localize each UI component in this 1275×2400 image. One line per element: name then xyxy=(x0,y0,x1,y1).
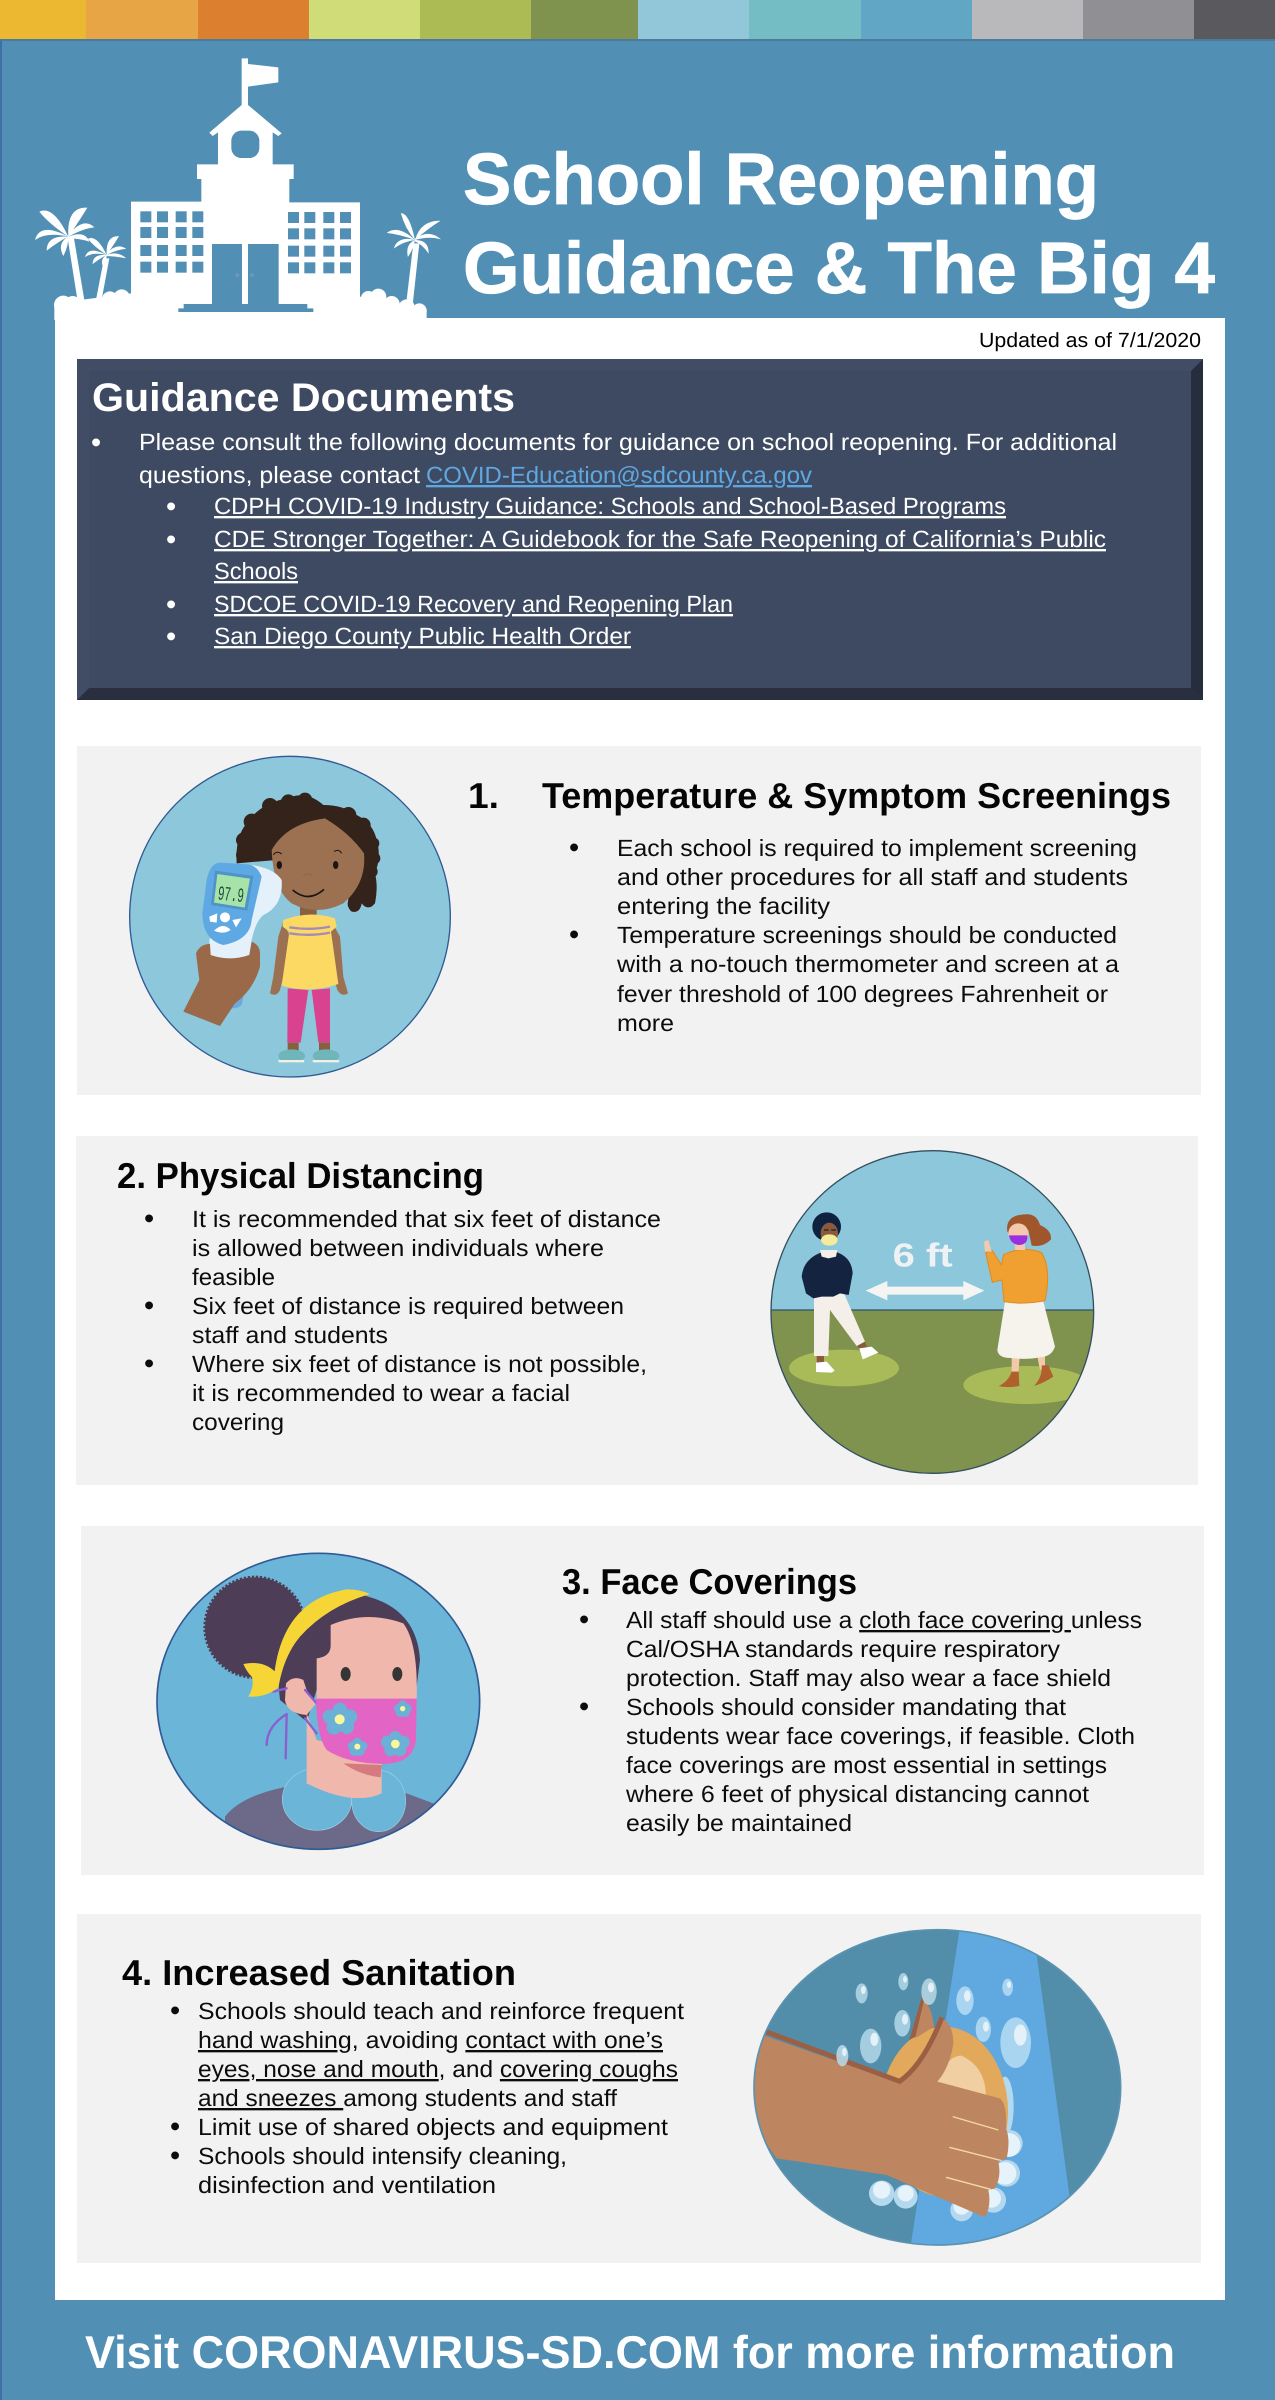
bullet list: screenings: entering the facility xyxy=(617,893,830,919)
footer call to action: Visit CORONAVIRUS-SD.COM for more information xyxy=(85,2326,1175,2378)
guidance document links: San Diego County Public Health Order xyxy=(214,623,631,649)
bullet list: face coverings: students wear face coverings, if feasible. Cloth xyxy=(626,1723,1135,1749)
guidance intro bullet: COVID-Education@sdcounty.ca.gov xyxy=(426,462,812,488)
white content sheet xyxy=(55,318,1225,2300)
guidance document links: • xyxy=(166,491,176,523)
bullet list: sanitation: • xyxy=(170,2140,180,2172)
heading: face coverings: 3. Face Coverings xyxy=(562,1561,857,1602)
bullet list: screenings: • xyxy=(569,832,579,864)
bullet list: screenings: Temperature screenings should be conducted xyxy=(617,922,1117,948)
bullet list: sanitation: • xyxy=(170,1995,180,2027)
colour swatch bar xyxy=(0,0,1275,39)
heading: temperature and symptom screenings: Temperature & Symptom Screenings xyxy=(542,775,1171,816)
guidance document links: Schools xyxy=(214,558,298,584)
bullet list: face coverings: • xyxy=(579,1691,589,1723)
guidance intro bullet: questions, please contact xyxy=(139,462,420,488)
guidance document links: • xyxy=(166,621,176,653)
bullet list: screenings: fever threshold of 100 degrees Fahrenheit or xyxy=(617,981,1108,1007)
panel: face coverings xyxy=(81,1526,1204,1875)
bullet list: face coverings: • xyxy=(579,1604,589,1636)
illustration: girl with flowered face mask xyxy=(157,1553,480,1860)
guidance intro bullet: Please consult the following documents for guidance on school reopening. For additional xyxy=(139,429,1117,455)
arrow: six feet double arrow xyxy=(866,1281,984,1300)
icon: school building with palm trees xyxy=(35,58,441,320)
bullet list: screenings: more xyxy=(617,1010,674,1036)
guidance document links: • xyxy=(166,524,176,556)
illustration: two people six feet apart xyxy=(767,1147,1100,1477)
illustration: child temperature screening: 97.9 xyxy=(217,883,245,908)
heading: temperature and symptom screenings: 1. xyxy=(468,775,499,816)
bullet list: face coverings: easily be maintained xyxy=(626,1810,852,1836)
bullet list: sanitation: and sneezes among students and staff xyxy=(198,2085,617,2111)
illustration: hands washing with soap xyxy=(750,1927,1121,2250)
bullet list: sanitation: eyes, nose and mouth , and covering coughs xyxy=(198,2056,678,2082)
bullet list: screenings: • xyxy=(569,919,579,951)
bullet list: face coverings: where 6 feet of physical distancing cannot xyxy=(625,1781,1089,1807)
panel: guidance documents xyxy=(77,359,1203,700)
updated date: Updated as of 7/1/2020 xyxy=(979,329,1201,352)
illustration: child temperature screening xyxy=(130,756,450,1077)
bullet list: distancing: is allowed between individuals where xyxy=(192,1235,604,1261)
bullet list: distancing: • xyxy=(144,1348,154,1380)
guidance document links: CDE Stronger Together: A Guidebook for the Safe Reopening of California’s Public xyxy=(214,526,1106,552)
bullet list: distancing: It is recommended that six feet of distance xyxy=(192,1206,661,1232)
figure: woman with purple mask xyxy=(984,1214,1055,1387)
bullet list: distancing: • xyxy=(144,1203,154,1235)
guidance document links: CDPH COVID-19 Industry Guidance: Schools and School-Based Programs xyxy=(214,493,1006,519)
bullet list: face coverings xyxy=(579,1604,1142,1836)
label: 6 ft: 6 ft xyxy=(893,1237,953,1274)
bullet list: screenings: with a no-touch thermometer and screen at a xyxy=(616,951,1120,977)
bullet list: sanitation xyxy=(170,1995,684,2198)
bullet list: distancing: Where six feet of distance is not possible, xyxy=(192,1351,647,1377)
heading: guidance documents: Guidance Documents xyxy=(92,376,515,420)
guidance intro bullet: • xyxy=(91,427,101,459)
panel: increased sanitation xyxy=(77,1914,1201,2263)
bullet list: face coverings: Schools should consider mandating that xyxy=(626,1694,1066,1720)
bullet list: face coverings: face coverings are most essential in settings xyxy=(626,1752,1107,1778)
bullet list: screenings: Each school is required to implement screening xyxy=(617,835,1137,861)
heading: increased sanitation: 4. Increased Sanitation xyxy=(122,1952,516,1993)
bullet list: distancing: it is recommended to wear a facial xyxy=(192,1380,570,1406)
bullet list: distancing: staff and students xyxy=(192,1322,388,1348)
bullet list: distancing xyxy=(144,1203,661,1435)
bullet list: distancing: feasible xyxy=(192,1264,275,1290)
bullet list: sanitation: • xyxy=(170,2111,180,2143)
heading: physical distancing: 2. Physical Distancing xyxy=(117,1155,484,1196)
bullet list: distancing: • xyxy=(144,1290,154,1322)
guidance intro bullet xyxy=(91,427,1117,488)
bullet list: sanitation: hand washing , avoiding contact with one’s xyxy=(198,2027,663,2053)
bullet list: sanitation: Schools should teach and reinforce frequent xyxy=(198,1998,684,2024)
bullet list: face coverings: protection. Staff may also wear a face shield xyxy=(626,1665,1111,1691)
bullet list: distancing: Six feet of distance is required between xyxy=(192,1293,624,1319)
panel: physical distancing xyxy=(76,1136,1198,1485)
panel: temperature and symptom screenings xyxy=(77,746,1201,1095)
title xyxy=(463,139,1215,309)
bullet list: distancing: covering xyxy=(192,1409,284,1435)
guidance document links: • xyxy=(166,589,176,621)
bullet list: face coverings: Cal/OSHA standards require respiratory xyxy=(626,1636,1060,1662)
bullet list: face coverings: All staff should use a cloth face covering unless xyxy=(626,1607,1142,1633)
title: Guidance & The Big 4 xyxy=(463,228,1215,309)
bullet list: sanitation: disinfection and ventilation xyxy=(198,2172,496,2198)
bullet list: sanitation: Schools should intensify cleaning, xyxy=(198,2143,567,2169)
figure: man with mask xyxy=(802,1212,878,1373)
guidance document links: SDCOE COVID-19 Recovery and Reopening Plan xyxy=(214,591,733,617)
guidance document links xyxy=(166,491,1106,653)
bullet list: screenings: and other procedures for all staff and students xyxy=(617,864,1128,890)
title: School Reopening xyxy=(463,139,1099,220)
bullet list: screenings xyxy=(569,832,1137,1036)
bullet list: sanitation: Limit use of shared objects and equipment xyxy=(198,2114,668,2140)
